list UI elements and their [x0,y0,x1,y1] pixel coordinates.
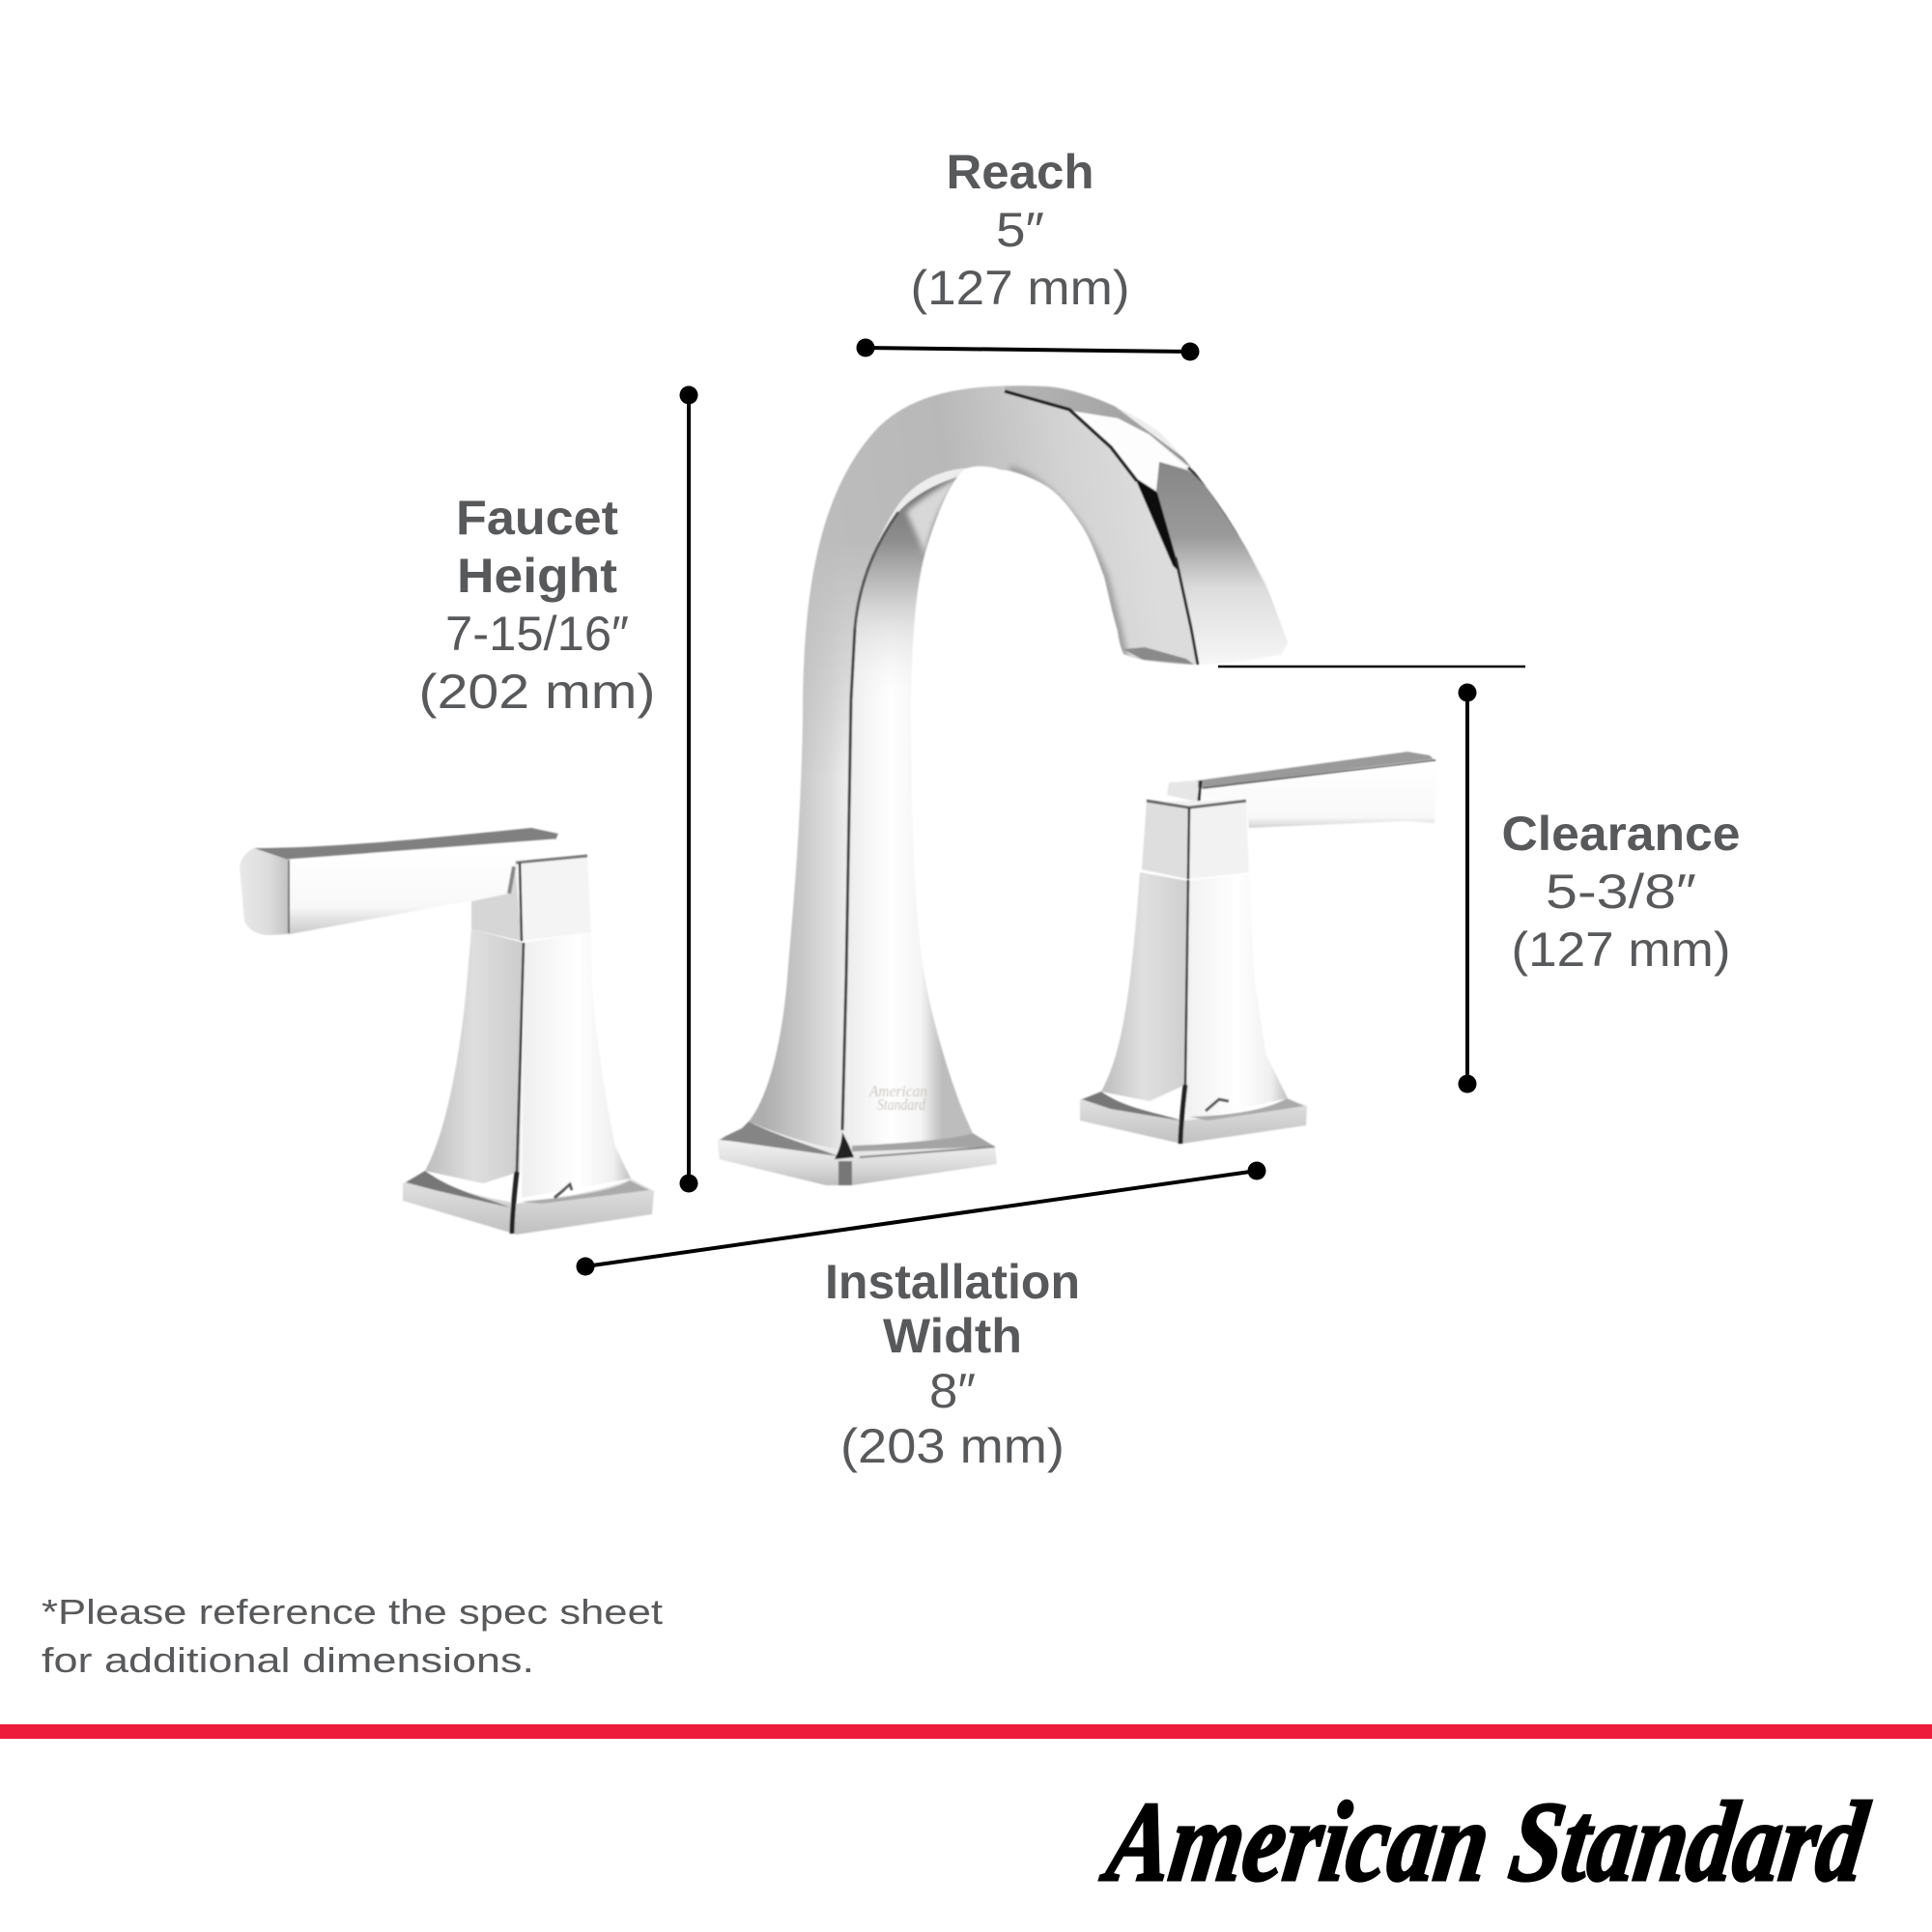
dark crease on stem [842,628,855,1130]
label: installation width: Installation [825,1255,1080,1309]
stem [425,929,524,1183]
label: clearance: Clearance [1501,807,1741,861]
top dark line and crease [1005,391,1137,481]
engraved logo on faucet: Standard [877,1095,925,1114]
spout tip [1123,647,1194,665]
white front face [867,647,974,1144]
footnote [42,1592,663,1680]
label: faucet height: 7-15/16″ [445,607,629,661]
label: clearance: 5-3/8″ [1546,865,1696,919]
label: reach: 5″ [996,203,1044,257]
faucet: right handle [1080,751,1437,1144]
shading along inner arch edge [1009,469,1123,657]
label: faucet height: Faucet [456,491,618,545]
faucet: left handle [240,828,654,1235]
faucet: main spout [705,367,1304,1198]
base [403,1171,654,1235]
underside of arch [856,477,957,665]
bright highlight [1069,411,1188,490]
label: reach: (127 mm) [910,261,1130,315]
footnote: *Please reference the spec sheet [42,1592,663,1632]
dimension line: clearance [1459,684,1476,1094]
arch front face [806,385,1196,736]
label: reach [910,145,1130,315]
collar [471,857,591,941]
label: clearance: (127 mm) [1511,923,1731,977]
cap [1142,800,1249,879]
red divider bar [0,1724,1932,1739]
engraved logo on faucet [868,1082,927,1114]
left strip [748,599,838,1148]
end face [1155,462,1275,663]
clearance reference line [1218,666,1525,668]
gray strip above highlight [1005,385,1191,468]
lever [240,828,562,935]
label: installation width: 8″ [929,1364,976,1418]
dimension line: reach [856,338,1200,361]
label: faucet height: (202 mm) [419,665,655,719]
engraved logo on faucet: American [868,1082,927,1100]
dimension line: faucet height [680,386,697,1192]
label: reach: Reach [947,145,1094,199]
label: faucet height: Height [457,549,617,603]
label: installation width: Width [883,1309,1022,1363]
label: installation width: (203 mm) [840,1419,1065,1473]
label: faucet height [419,491,655,719]
lever [1167,751,1437,828]
base [718,1122,997,1185]
label: clearance [1501,807,1741,977]
dimension line: installation width [576,1161,1265,1275]
label: installation width [825,1255,1080,1473]
base [1080,1092,1307,1144]
footnote: for additional dimensions. [42,1640,534,1680]
stem [1101,872,1188,1101]
